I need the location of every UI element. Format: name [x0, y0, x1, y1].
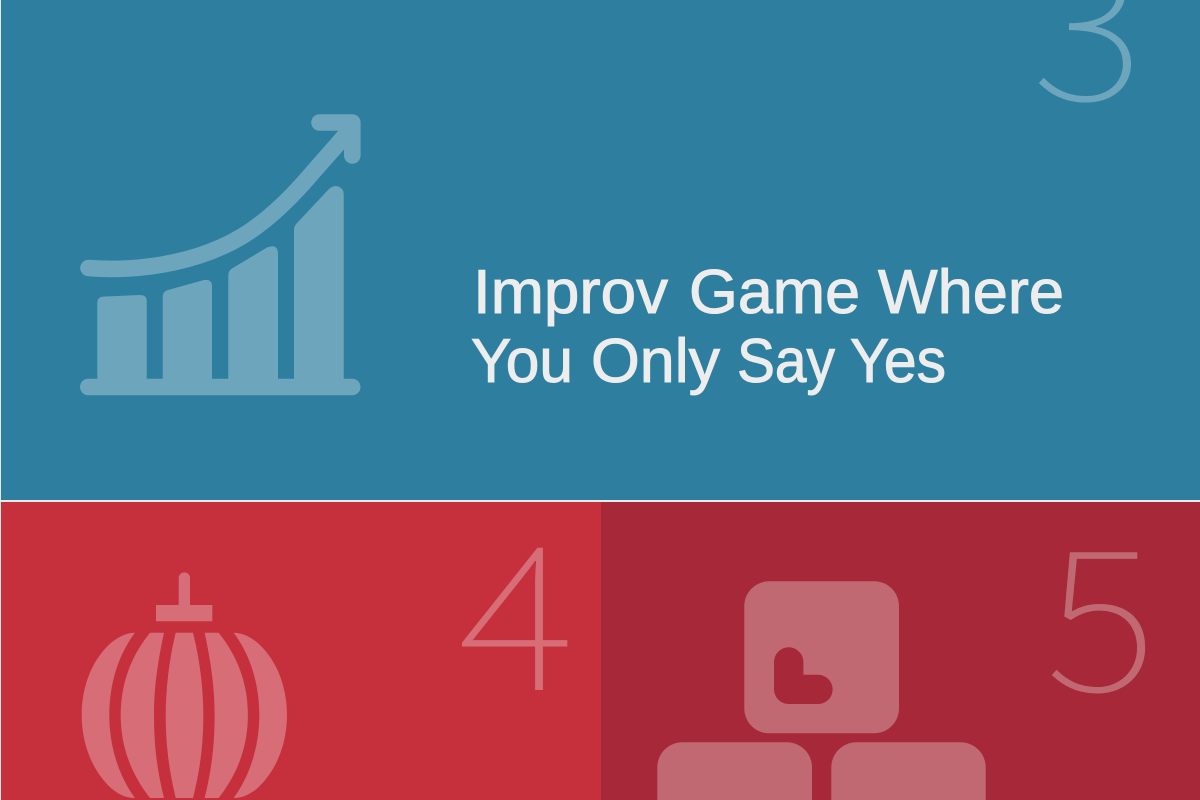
- title: Only: [591, 327, 720, 396]
- icon: rising bar chart with arrow: [80, 122, 360, 395]
- title: Where: [878, 258, 1064, 327]
- icon: keyboard keys with heart key: [657, 581, 986, 800]
- title: You: [471, 327, 573, 396]
- number 4: 4: [458, 456, 575, 749]
- title: Improv: [473, 258, 668, 327]
- panel: red step 4: [1, 456, 601, 800]
- title: Say: [737, 327, 835, 396]
- icon: round lantern: [82, 572, 287, 798]
- number 5: 5: [1046, 463, 1156, 749]
- panel: dark red step 5: [601, 463, 1200, 800]
- title: [471, 258, 1064, 396]
- title: Yes: [850, 327, 946, 396]
- title: Game: [689, 258, 860, 327]
- panel: blue step 3: [1, 0, 1200, 500]
